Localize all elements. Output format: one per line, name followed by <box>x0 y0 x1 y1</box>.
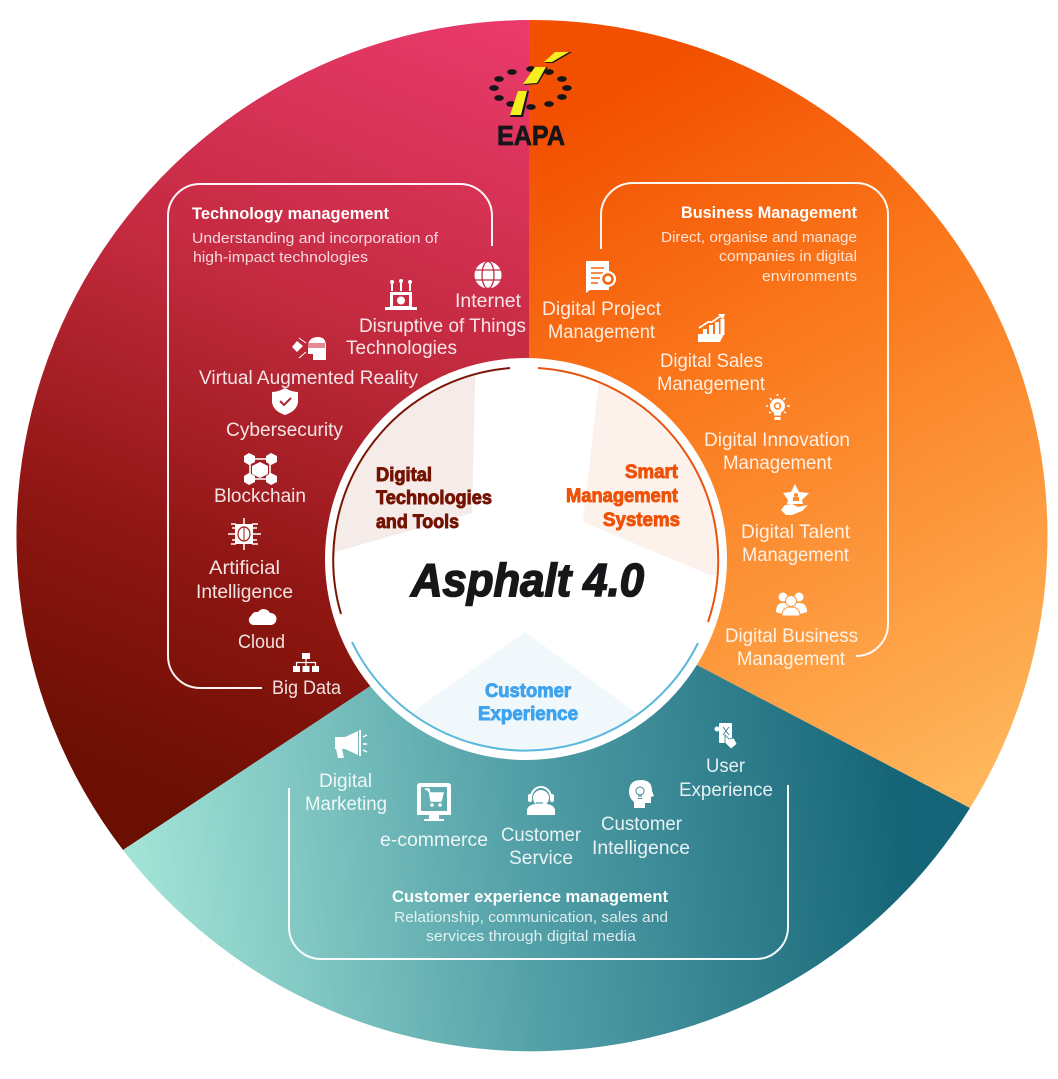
icon: customer service agent <box>527 787 555 815</box>
icon: internet globe <box>474 262 502 288</box>
label: Cloud: Cloud <box>238 632 285 653</box>
label: Intelligence: Intelligence <box>592 838 690 859</box>
heading: Smart Management Systems: Smart <box>625 462 679 483</box>
label: Disruptive of Things: Disruptive of Things <box>359 316 526 337</box>
label: Customer: Customer <box>601 814 683 835</box>
icon: big data hierarchy <box>293 653 319 672</box>
label: Digital Sales: Digital Sales <box>660 351 763 372</box>
text block: business management <box>661 204 857 285</box>
label: Virtual Augmented Reality: Virtual Augmented Reality <box>199 368 418 389</box>
wedge: management tint <box>583 383 718 575</box>
label: Customer: Customer <box>501 825 582 846</box>
icon: innovation bulb <box>766 394 790 420</box>
text block: technology management <box>192 205 439 266</box>
wedge: customer tint <box>414 632 638 752</box>
text block: business management: environments <box>762 268 857 285</box>
label: Digital Innovation: Digital Innovation <box>704 430 850 451</box>
text block: technology management: Understanding and incorporation of <box>192 230 439 247</box>
heading: Customer Experience: Customer <box>485 681 572 702</box>
text block: customer experience management: Customer experience management <box>392 888 669 906</box>
text block: customer experience management <box>392 888 669 945</box>
heading: Customer Experience: Experience <box>478 704 578 725</box>
label: Management: Management <box>657 374 766 395</box>
panel: technology outline <box>168 184 492 688</box>
icon: user experience touch <box>714 723 737 749</box>
text block: technology management: Technology management <box>192 205 389 223</box>
panel: business outline <box>601 183 888 656</box>
heading: Customer Experience <box>478 681 578 725</box>
icon: disruptive technologies laptop <box>385 279 417 310</box>
icon: blockchain cubes <box>244 453 277 485</box>
icon: business people group <box>776 592 807 616</box>
label: Blockchain: Blockchain <box>214 486 306 507</box>
icon: project document gear <box>586 261 616 293</box>
logo: EAPA: EAPA <box>497 120 565 151</box>
label: User: User <box>706 756 746 777</box>
arc: customer <box>352 642 698 751</box>
heading: Digital Technologies and Tools: Technologies <box>376 488 492 509</box>
icon: customer intelligence head bulb <box>629 780 654 808</box>
text block: business management: Direct, organise and manage <box>661 229 857 246</box>
panel: technology sector <box>16 20 529 850</box>
heading: Digital Technologies and Tools: and Tools <box>376 512 459 533</box>
logo: EAPA <box>489 52 572 151</box>
label: Experience: Experience <box>679 780 773 801</box>
label: Management: Management <box>548 322 656 343</box>
text block: customer experience management: Relationship, communication, sales and <box>394 909 668 926</box>
panel: central circle <box>325 358 727 760</box>
heading: Smart Management Systems <box>566 462 680 531</box>
label: e-commerce: e-commerce <box>380 830 488 851</box>
arc: management <box>538 368 718 622</box>
label: Management: Management <box>737 649 846 670</box>
arc: technologies <box>333 368 510 614</box>
heading: Smart Management Systems: Management <box>566 486 679 507</box>
wedge: technologies tint <box>334 375 475 552</box>
text block: technology management: high-impact technologies <box>193 249 368 266</box>
title: Asphalt 4.0: Asphalt 4.0 <box>410 554 644 606</box>
label: Digital Business: Digital Business <box>725 626 858 647</box>
label: Management: Management <box>742 545 850 566</box>
icon: cloud <box>249 609 277 625</box>
icon: sales chart <box>698 314 725 342</box>
heading: Digital Technologies and Tools: Digital <box>376 465 432 486</box>
label: Marketing: Marketing <box>305 794 387 815</box>
label: Digital Talent: Digital Talent <box>741 522 851 543</box>
text block: business management: Business Management <box>681 204 857 222</box>
heading: Digital Technologies and Tools <box>376 465 492 533</box>
label: Management: Management <box>723 453 833 474</box>
label: Technologies: Technologies <box>346 338 457 359</box>
icon: cybersecurity shield <box>272 388 298 415</box>
label: Digital Project: Digital Project <box>542 299 662 320</box>
icon: virtual reality head <box>292 337 326 360</box>
panel: business sector <box>529 20 1048 808</box>
icon: e-commerce screen cart <box>417 783 451 821</box>
label: Digital: Digital <box>319 771 372 792</box>
icon: megaphone <box>335 730 367 758</box>
text block: customer experience management: services through digital media <box>426 928 637 945</box>
label: Cybersecurity: Cybersecurity <box>226 420 343 441</box>
label: Internet: Internet <box>455 291 522 312</box>
label: Intelligence: Intelligence <box>196 582 293 603</box>
panel: customer outline <box>289 785 788 959</box>
heading: Smart Management Systems: Systems <box>603 510 680 531</box>
label: Big Data: Big Data <box>272 678 341 699</box>
icon: talent star in hand <box>781 484 809 515</box>
icon: artificial intelligence chip <box>228 518 261 550</box>
panel: customer sector <box>123 600 970 1051</box>
label: Artificial: Artificial <box>209 558 280 579</box>
label: Service: Service <box>509 848 573 869</box>
text block: business management: companies in digital <box>719 248 857 265</box>
